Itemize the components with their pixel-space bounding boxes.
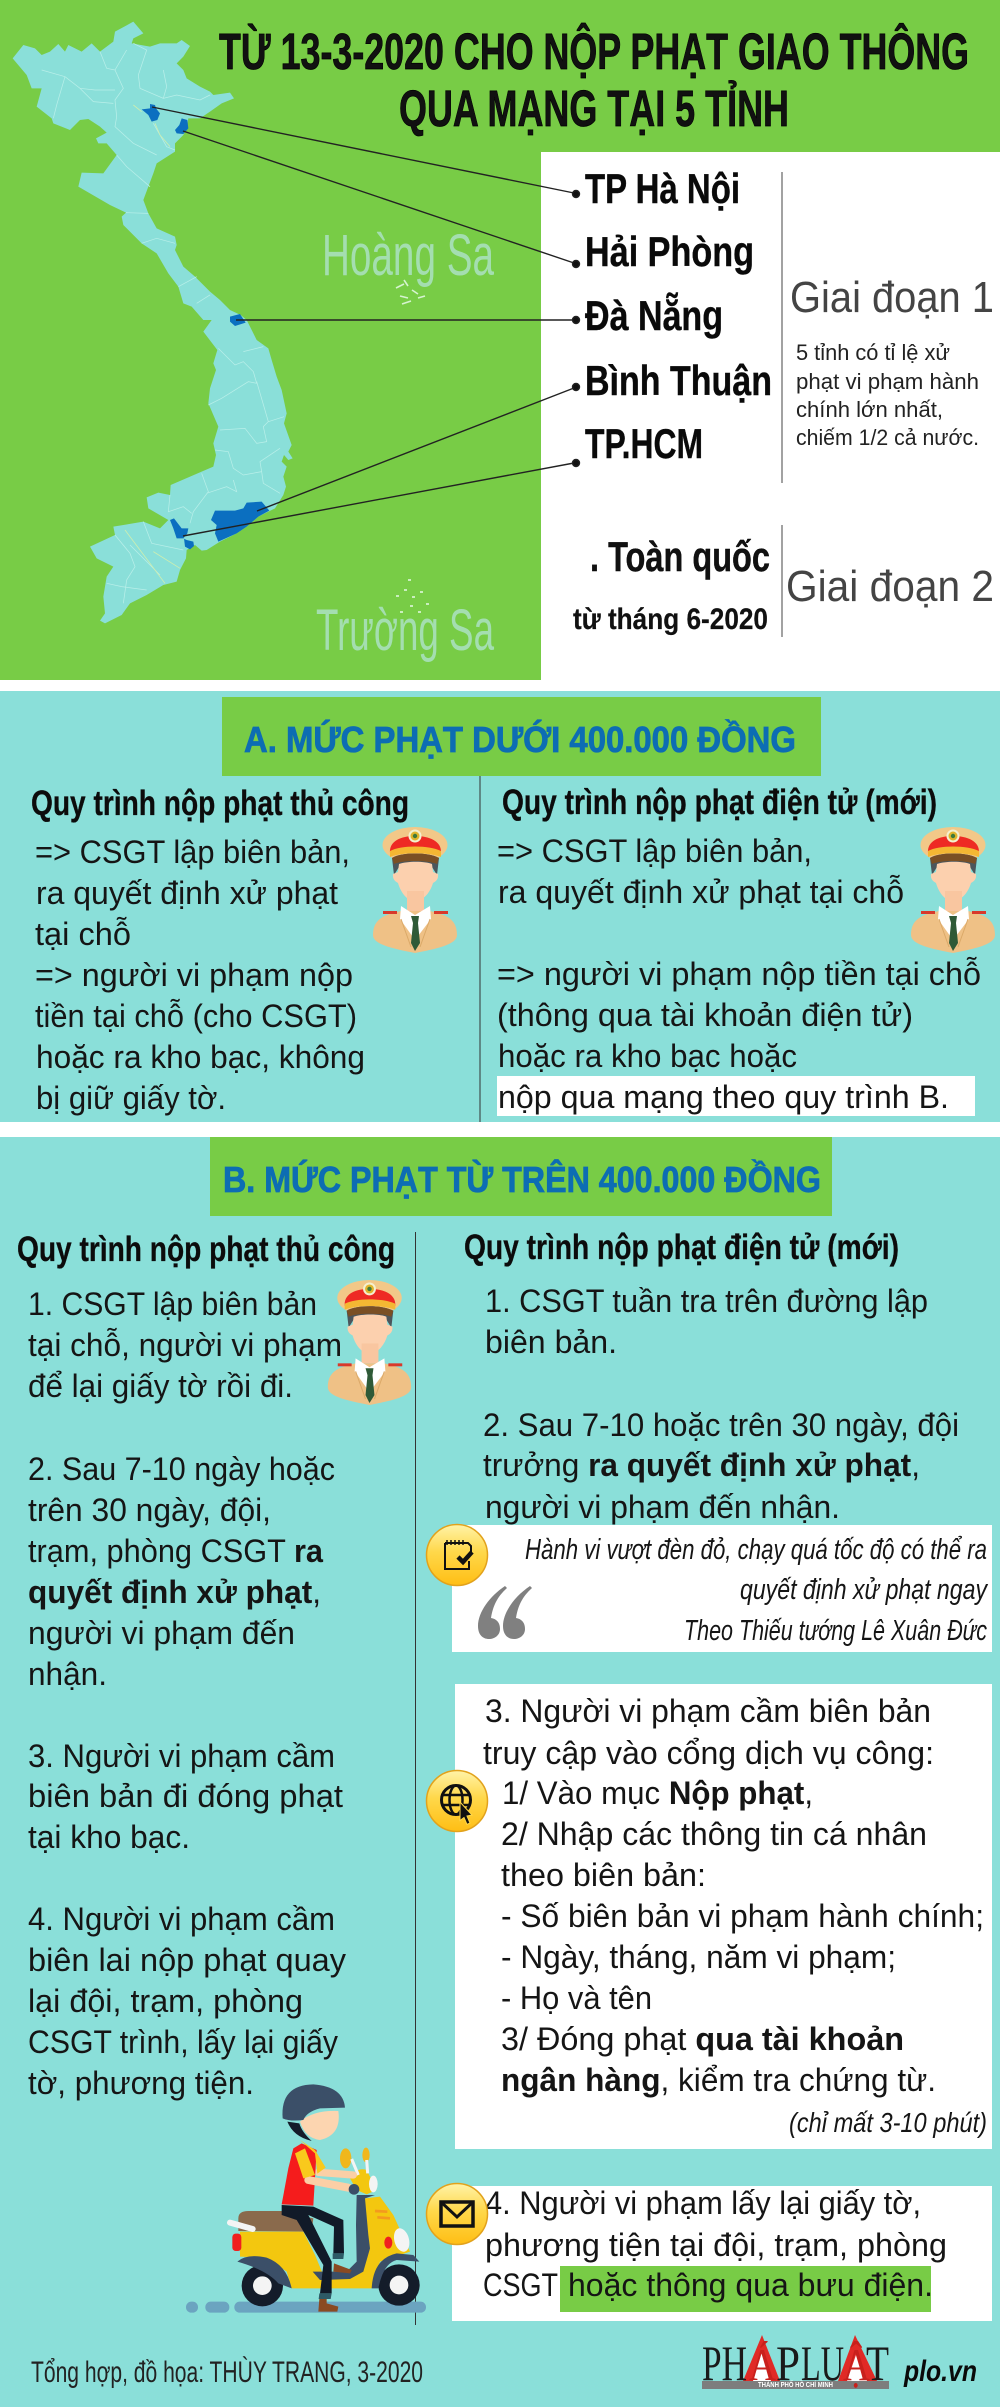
manual process text: tại chỗ bbox=[35, 916, 131, 952]
manual process text: bị giữ giấy tờ. bbox=[36, 1080, 226, 1116]
manual steps text: tại chỗ, người vi phạm bbox=[28, 1327, 342, 1363]
Da Nang bbox=[230, 314, 246, 326]
manual steps text: tờ, phương tiện. bbox=[28, 2065, 254, 2101]
icon: globe with cursor bbox=[426, 1770, 488, 1832]
electronic process text: (thông qua tài khoản điện tử) bbox=[497, 997, 913, 1033]
manual steps text: CSGT trình, lấy lại giấy bbox=[28, 2024, 338, 2060]
panel: online payment steps: 1/ Vào mục Nộp phạt, bbox=[502, 1775, 813, 1811]
panel: online payment steps: 3. Người vi phạm cầm biên bản bbox=[485, 1693, 931, 1729]
phase 1 description: 5 tỉnh có tỉ lệ xử bbox=[796, 340, 950, 365]
manual process text: tiền tại chỗ (cho CSGT) bbox=[35, 998, 357, 1034]
manual steps text: người vi phạm đến bbox=[28, 1615, 295, 1651]
manual steps text: trên 30 ngày, đội, bbox=[28, 1492, 271, 1528]
panel: step 4 bbox=[452, 2185, 992, 2321]
province list: Đà Nẵng bbox=[585, 291, 723, 339]
province list bbox=[585, 165, 772, 467]
manual steps text: 4. Người vi phạm cầm bbox=[28, 1901, 335, 1937]
title bbox=[219, 22, 969, 137]
manual process text bbox=[35, 834, 365, 1116]
logo: Phap Luat bbox=[702, 2335, 889, 2391]
logo: Phap Luat: LU bbox=[801, 2335, 844, 2391]
electronic steps 1 and 2 bbox=[483, 1283, 959, 1525]
manual process text: ra quyết định xử phạt bbox=[36, 875, 338, 911]
Hai Phong bbox=[175, 118, 188, 134]
electronic process text: ra quyết định xử phạt tại chỗ bbox=[498, 874, 904, 910]
panel: step 4: CSGT bbox=[483, 2267, 558, 2303]
panel: step 4: hoặc thông qua bưu điện. bbox=[568, 2267, 933, 2303]
column heading: electronic process: Quy trình nộp phạt điện tử (mới) bbox=[464, 1228, 899, 1267]
electronic steps 1 and 2: 2. Sau 7-10 hoặc trên 30 ngày, đội bbox=[483, 1407, 959, 1443]
website label: plo.vn bbox=[903, 2355, 977, 2388]
icon: envelope bbox=[426, 2184, 488, 2244]
manual steps text: 1. CSGT lập biên bản bbox=[28, 1286, 317, 1322]
title: QUA MẠNG TẠI 5 TỈNH bbox=[399, 79, 789, 137]
icon: traffic officer bbox=[373, 827, 457, 953]
manual steps text: 2. Sau 7-10 ngày hoặc bbox=[28, 1451, 335, 1487]
panel: online payment steps: truy cập vào cổng dịch vụ công: bbox=[483, 1735, 934, 1771]
electronic process text: => người vi phạm nộp tiền tại chỗ bbox=[497, 956, 981, 992]
map of Vietnam bbox=[13, 22, 293, 623]
column heading: manual process: Quy trình nộp phạt thủ công bbox=[31, 784, 409, 823]
panel: step 4: 4. Người vi phạm lấy lại giấy tờ, bbox=[485, 2185, 921, 2221]
manual steps text: biên bản đi đóng phạt bbox=[28, 1778, 343, 1814]
map label: Hoang Sa: Hoàng Sa bbox=[322, 223, 494, 288]
province list: Hải Phòng bbox=[585, 228, 754, 275]
phase 1 description: chính lớn nhất, bbox=[796, 397, 943, 422]
electronic steps 1 and 2: biên bản. bbox=[485, 1324, 617, 1360]
panel: section B bbox=[0, 1137, 1000, 2407]
column heading: manual process: Quy trình nộp phạt thủ công bbox=[17, 1230, 395, 1269]
electronic process text bbox=[497, 833, 981, 1116]
manual process text: => người vi phạm nộp bbox=[35, 957, 353, 993]
logo: Phap Luat: THÀNH PHỐ HỒ CHÍ MINH bbox=[758, 2379, 833, 2389]
section B heading: B. MỨC PHẠT TỪ TRÊN 400.000 ĐỒNG bbox=[223, 1158, 821, 1200]
logo: Phap Luat: P bbox=[776, 2335, 800, 2391]
illustration: scooter rider bbox=[186, 2084, 426, 2313]
map label: Truong Sa bbox=[316, 580, 494, 663]
electronic process text: nộp qua mạng theo quy trình B. bbox=[498, 1079, 949, 1115]
section B heading bbox=[210, 1137, 832, 1216]
panel: section A bbox=[0, 691, 1000, 1122]
manual steps text: biên lai nộp phạt quay bbox=[28, 1942, 346, 1978]
panel: online payment steps: - Số biên bản vi phạm hành chính; bbox=[501, 1898, 984, 1934]
manual steps text: để lại giấy tờ rồi đi. bbox=[28, 1368, 293, 1404]
callout: quote bbox=[452, 1525, 992, 1652]
electronic process text: hoặc ra kho bạc hoặc bbox=[498, 1038, 797, 1074]
panel: online payment steps: 3/ Đóng phạt qua tài khoản bbox=[501, 2021, 904, 2057]
province list: TP.HCM bbox=[585, 420, 703, 467]
panel: online payment steps: - Ngày, tháng, năm vi phạm; bbox=[501, 1939, 896, 1975]
Hanoi bbox=[142, 104, 160, 122]
map label: Truong Sa: Trường Sa bbox=[316, 598, 494, 663]
panel: online payment steps bbox=[455, 1684, 992, 2149]
manual process text: => CSGT lập biên bản, bbox=[35, 834, 350, 870]
manual steps text: nhận. bbox=[28, 1656, 107, 1692]
logo: Phap Luat: Ậ bbox=[843, 2339, 870, 2390]
province list: TP Hà Nội bbox=[585, 165, 740, 212]
nationwide label bbox=[573, 533, 770, 636]
Ho Chi Minh City bbox=[170, 518, 194, 549]
electronic steps 1 and 2: trưởng ra quyết định xử phạt, bbox=[483, 1447, 920, 1483]
electronic steps 1 and 2: người vi phạm đến nhận. bbox=[485, 1489, 840, 1525]
manual steps text: quyết định xử phạt, bbox=[28, 1574, 321, 1610]
section A heading bbox=[222, 697, 821, 776]
section A heading: A. MỨC PHẠT DƯỚI 400.000 ĐỒNG bbox=[244, 718, 796, 760]
phase 1 description: phạt vi phạm hành bbox=[796, 369, 979, 394]
icon: quotation mark bbox=[478, 1586, 532, 1639]
panel: online payment steps: theo biên bản: bbox=[501, 1857, 706, 1893]
phase 1 description: chiếm 1/2 cả nước. bbox=[796, 425, 979, 450]
manual steps text: lại đội, trạm, phòng bbox=[28, 1983, 303, 2019]
manual process text: hoặc ra kho bạc, không bbox=[36, 1039, 365, 1075]
panel: map and provinces bbox=[0, 0, 1000, 680]
electronic process text: => CSGT lập biên bản, bbox=[497, 833, 812, 869]
panel: online payment steps: - Họ và tên bbox=[501, 1980, 652, 2016]
logo: Phap Luat: Á bbox=[749, 2339, 776, 2390]
panel: step 4: phương tiện tại đội, trạm, phòng bbox=[485, 2227, 947, 2263]
map label: Hoang Sa bbox=[322, 223, 494, 304]
Binh Thuan bbox=[211, 502, 269, 542]
credit line: Tổng hợp, đồ họa: THÙY TRANG, 3-2020 bbox=[31, 2356, 423, 2389]
phase 1 description bbox=[796, 340, 979, 450]
nationwide label: . Toàn quốc bbox=[590, 533, 770, 580]
icon: notepad with check bbox=[426, 1524, 488, 1586]
logo: Phap Luat: T bbox=[866, 2335, 889, 2391]
province list: Bình Thuận bbox=[585, 357, 772, 404]
icon: traffic officer bbox=[911, 827, 995, 953]
icon: traffic officer bbox=[328, 1280, 411, 1405]
manual steps text: tại kho bạc. bbox=[28, 1819, 190, 1855]
manual steps text: trạm, phòng CSGT ra bbox=[28, 1533, 323, 1569]
electronic steps 1 and 2: 1. CSGT tuần tra trên đường lập bbox=[485, 1283, 928, 1319]
logo: Phap Luat: PH bbox=[702, 2335, 747, 2391]
manual steps text: 3. Người vi phạm cầm bbox=[28, 1738, 335, 1774]
connector lines bbox=[152, 107, 580, 536]
manual steps text bbox=[28, 1286, 346, 2101]
panel: online payment steps: 2/ Nhập các thông tin cá nhân bbox=[501, 1816, 927, 1852]
nationwide label: từ tháng 6-2020 bbox=[573, 603, 768, 636]
panel: online payment steps: ngân hàng, kiểm tra chứng từ. bbox=[501, 2062, 936, 2098]
